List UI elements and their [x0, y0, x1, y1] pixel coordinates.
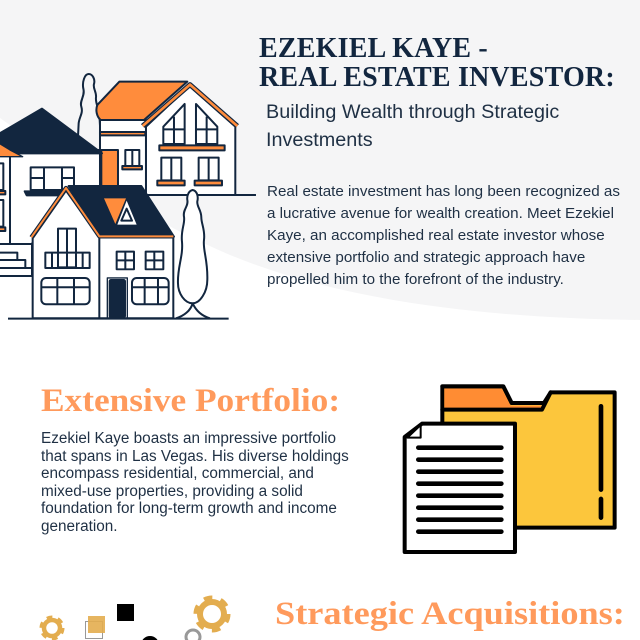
subtitle — [266, 101, 559, 151]
title — [259, 32, 615, 93]
text: extensive portfolio: Ezekiel Kaye boasts an impressive portfolio — [41, 430, 336, 447]
text: extensive portfolio: foundation for long-term growth and income — [41, 500, 337, 517]
subtitle: Investments — [266, 129, 373, 151]
subtitle: Building Wealth through Strategic — [266, 101, 559, 123]
text: extensive portfolio: that spans in Las Vegas. His diverse holdings — [41, 448, 349, 465]
front tree — [178, 190, 207, 303]
intro paragraph: propelled him to the forefront of the industry. — [267, 271, 564, 288]
text: extensive portfolio: encompass residential, commercial, and — [41, 465, 314, 482]
intro paragraph — [267, 183, 620, 288]
intro paragraph: Kaye, an accomplished real estate investor whose — [267, 227, 605, 244]
heading: strategic acquisitions: Strategic Acquisitions: — [275, 596, 625, 632]
left house — [0, 150, 100, 268]
intro paragraph: extensive portfolio and strategic approach have — [267, 249, 585, 266]
back house — [100, 120, 146, 195]
text: extensive portfolio: generation. — [41, 518, 118, 535]
title: REAL ESTATE INVESTOR: — [259, 62, 615, 93]
tall tree behind — [77, 74, 101, 150]
text: extensive portfolio: mixed-use properties, providing a solid — [41, 483, 303, 500]
front house — [33, 191, 173, 318]
intro paragraph: a lucrative avenue for wealth creation. Meet Ezekiel — [267, 205, 614, 222]
title: EZEKIEL KAYE - — [259, 32, 488, 64]
text: extensive portfolio — [41, 430, 349, 535]
heading: extensive portfolio: Extensive Portfolio: — [41, 383, 340, 419]
intro paragraph: Real estate investment has long been recognized as — [267, 183, 620, 200]
